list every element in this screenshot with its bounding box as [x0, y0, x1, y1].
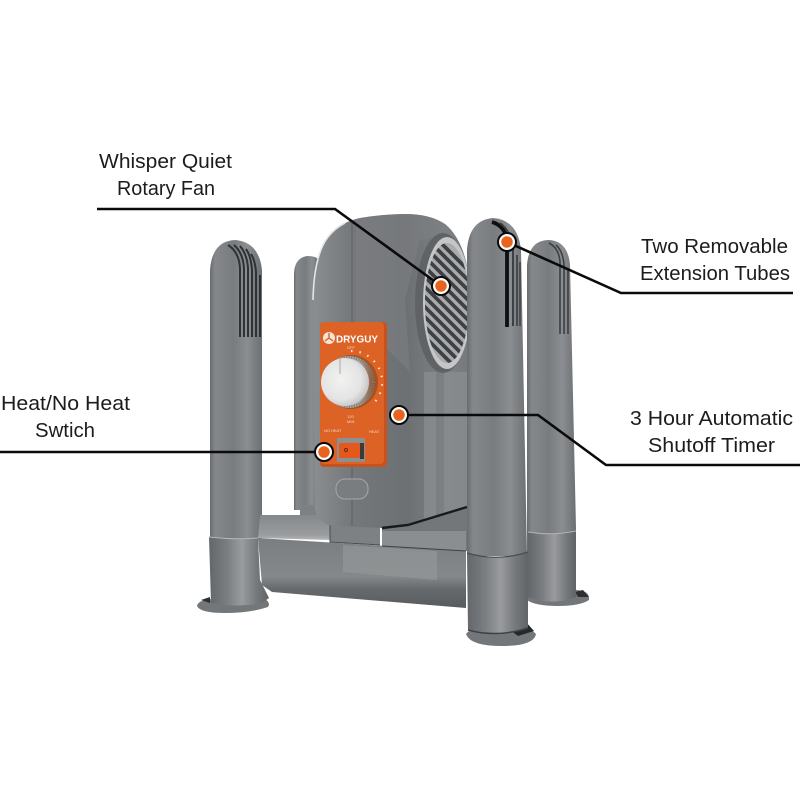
vent slots — [228, 245, 260, 337]
label: fan — [99, 151, 232, 200]
label: timer: Shutoff Timer — [648, 435, 775, 457]
label: fan: Rotary Fan — [117, 178, 215, 200]
label: heat: Heat/No Heat — [1, 393, 130, 415]
callout: two removable extension tubes — [498, 233, 793, 293]
control panel: OFF — [347, 345, 356, 350]
tube: front right with foot — [466, 218, 536, 646]
main housing — [313, 214, 475, 528]
callout: automatic shutoff timer — [390, 406, 800, 465]
label: heat: Swtich — [35, 420, 95, 442]
callout: heat switch — [0, 393, 333, 461]
tube: back left extension — [294, 256, 319, 510]
rocker switch — [337, 438, 365, 462]
label: heat — [1, 393, 130, 442]
label: tubes — [640, 236, 790, 285]
label: tubes: Extension Tubes — [640, 263, 790, 285]
control panel: MIN — [347, 419, 354, 424]
label: timer: 3 Hour Automatic — [630, 408, 793, 430]
timer knob — [321, 351, 382, 409]
logo: DRYGUY — [336, 334, 378, 346]
tube: back right with foot — [527, 240, 589, 606]
logo — [323, 332, 378, 346]
fan grille — [415, 233, 467, 373]
label: fan: Whisper Quiet — [99, 151, 232, 173]
control panel: NO HEAT — [324, 428, 342, 433]
control panel: 120 — [347, 414, 354, 419]
oval button — [336, 479, 368, 499]
control panel — [320, 322, 387, 467]
label: tubes: Two Removable — [641, 236, 788, 258]
centre clip — [330, 519, 380, 545]
label: timer — [630, 408, 793, 457]
callout: whisper quiet rotary fan — [97, 151, 450, 295]
control panel: HEAT — [369, 429, 380, 434]
base: manifold — [258, 505, 467, 608]
tube: front left with foot — [197, 240, 269, 613]
